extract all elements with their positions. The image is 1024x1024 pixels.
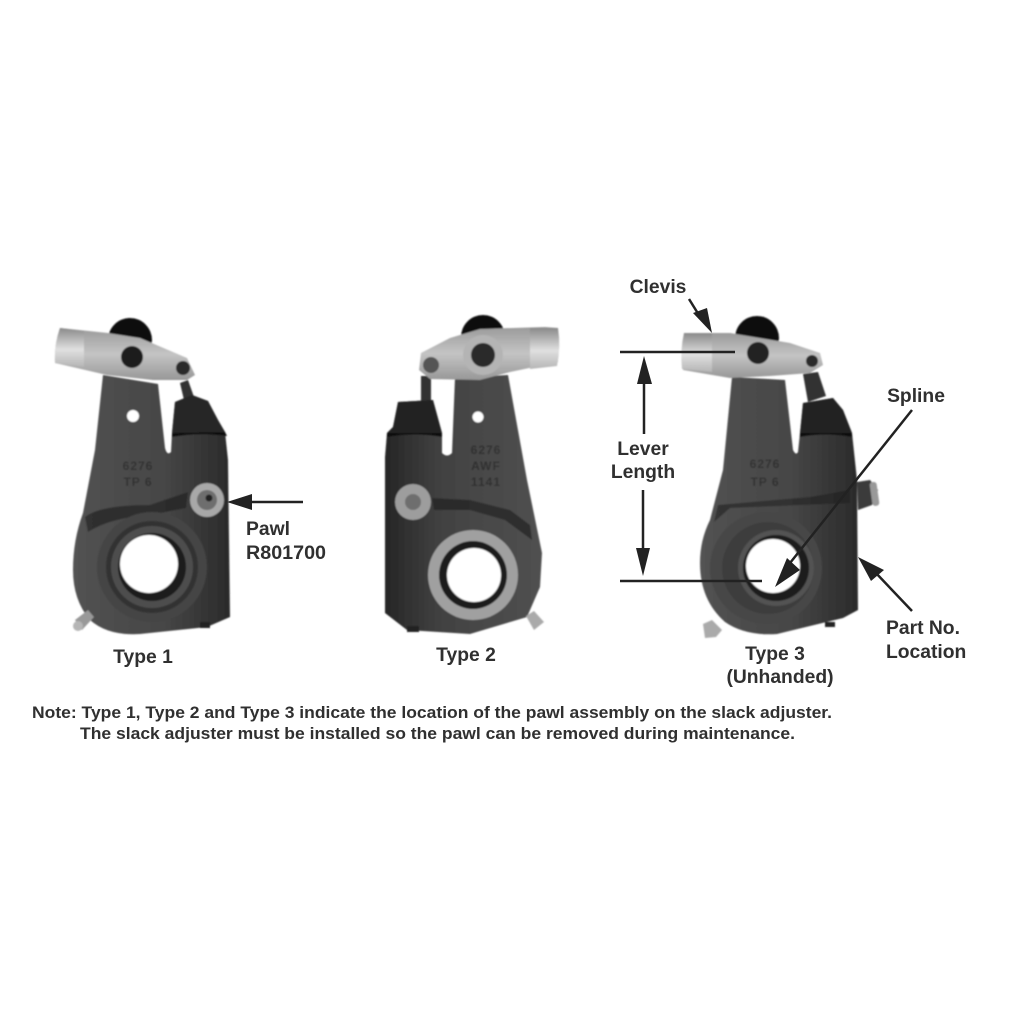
label: Lever Length: Lever: [617, 439, 669, 460]
slack adjuster Type 3: 6276: [750, 457, 780, 471]
lever length dimension: [620, 352, 762, 581]
slack adjuster Type 3: TP 6: [750, 475, 780, 489]
arrow: pawl: [227, 494, 303, 510]
slack adjuster Type 1: 6276: [123, 459, 153, 473]
note: Note: Type 1, Type 2 and Type 3 indicate the location of the pawl assembly on the slack adjuster.: [32, 704, 832, 722]
arrow: spline: [775, 410, 912, 587]
slack adjuster Type 1: [55, 318, 230, 634]
label: Type 1: Type 1: [113, 647, 173, 668]
label: Pawl R801700: [246, 519, 326, 564]
slack adjuster Type 3: [681, 316, 880, 638]
label: Type 3 (Unhanded): [726, 644, 834, 688]
arrow: part no. location: [858, 557, 912, 611]
label: Pawl R801700: Pawl: [246, 519, 290, 540]
label: Type 3 (Unhanded): (Unhanded): [726, 667, 834, 688]
label: Lever Length: [611, 439, 675, 483]
note: [32, 704, 832, 743]
label: Part No. Location: Location: [886, 642, 966, 663]
note: The slack adjuster must be installed so the pawl can be removed during maintenance.: [80, 725, 795, 743]
label: Spline: Spline: [887, 386, 945, 407]
label: Lever Length: Length: [611, 462, 675, 483]
label: Part No. Location: [886, 618, 966, 663]
slack adjuster Type 2: [385, 315, 559, 634]
label: Clevis: Clevis: [630, 277, 686, 298]
label: Type 3 (Unhanded): Type 3: [745, 644, 805, 665]
arrow: clevis: [689, 299, 712, 333]
label: Part No. Location: Part No.: [886, 618, 960, 639]
slack adjuster Type 2: AWF: [471, 459, 501, 473]
label: Type 2: Type 2: [436, 645, 496, 666]
label: Pawl R801700: R801700: [246, 543, 326, 564]
slack adjuster Type 1: TP 6: [123, 475, 153, 489]
slack adjuster Type 2: 1141: [471, 475, 501, 489]
slack adjuster Type 2: 6276: [471, 443, 501, 457]
